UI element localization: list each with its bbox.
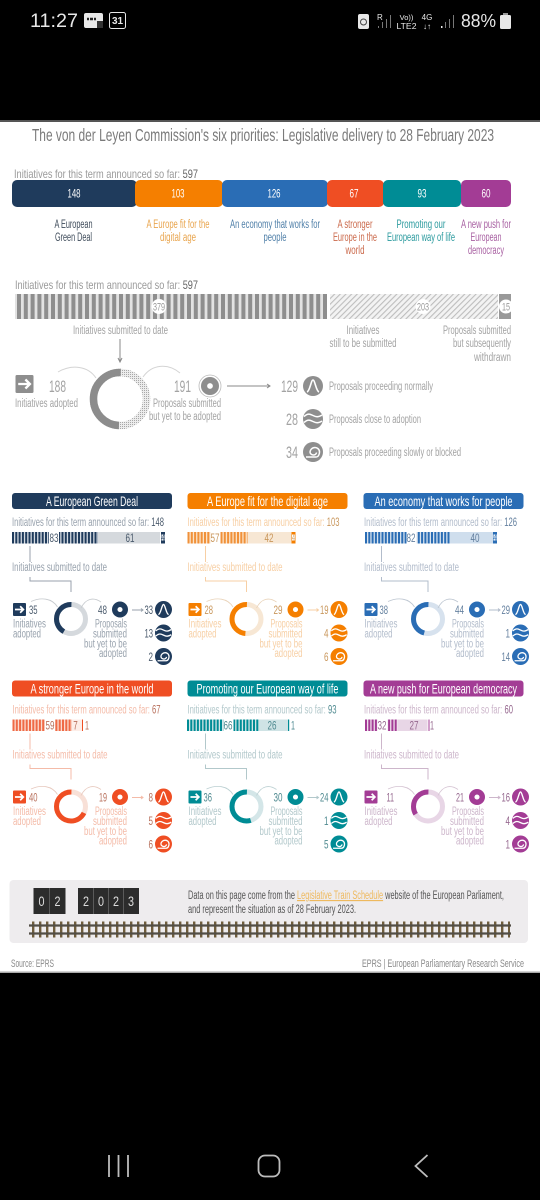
- priority labels: European: [470, 232, 502, 244]
- priority labels: Promoting our: [396, 219, 446, 231]
- date counter: 02 2023: 2: [54, 894, 60, 909]
- breakdown: 19: [320, 603, 329, 617]
- status bar: 83: [50, 531, 59, 545]
- adopted: adopted: [364, 816, 392, 828]
- adopted: 40: [29, 790, 38, 804]
- pending: adopted: [274, 836, 302, 848]
- pending: adopted: [99, 648, 127, 660]
- submitted label with connector: [364, 734, 459, 780]
- date counter: 02 2023: 0: [38, 894, 44, 909]
- adopted: adopted: [13, 628, 41, 640]
- breakdown: 1: [506, 626, 510, 640]
- date counter: 02 2023: 2: [113, 894, 119, 909]
- breakdown: slow or blocked: Proposals proceeding slowly or blocked: [329, 447, 461, 459]
- breakdown: 4: [324, 626, 329, 640]
- breakdown: 4: [506, 814, 510, 828]
- bar labels: withdrawn: [473, 352, 511, 364]
- submitted label with connector: [12, 546, 107, 592]
- stacked bar: six priorities: 60: [482, 188, 490, 200]
- pending: but yet to be: [84, 638, 127, 650]
- header: Promoting our European way of life: [196, 680, 339, 696]
- breakdown: 13: [144, 626, 153, 640]
- pending: 30: [274, 790, 283, 804]
- pending: 48: [98, 603, 107, 617]
- priority labels: A Europe fit for the: [146, 219, 210, 231]
- breakdown: [489, 601, 529, 665]
- status bar: 379 submitted, 203 still to submit, 15 withdrawn: 379: [153, 302, 165, 314]
- breakdown: close to adoption: 28: [286, 410, 298, 429]
- bar labels: still to be submitted: [330, 338, 396, 350]
- panel: A stronger Europe in the world: [12, 680, 172, 852]
- adopted: [188, 603, 222, 640]
- pending: 19: [99, 790, 107, 804]
- pending label: Proposals submitted: [153, 398, 221, 410]
- phone status bar: [30, 11, 511, 32]
- status bar: 1: [291, 718, 295, 732]
- breakdown: [132, 788, 172, 852]
- status bar: 4: [292, 534, 295, 542]
- pending: submitted: [450, 628, 484, 640]
- ring chart: [206, 786, 276, 821]
- status bar: 379 submitted, 203 still to submit, 15 withdrawn: 15: [502, 302, 510, 314]
- panel: overall status: [15, 278, 513, 462]
- adopted: Initiatives: [188, 618, 222, 630]
- priority labels: people: [264, 232, 286, 244]
- panel: A new push for European democracy: [364, 680, 529, 852]
- submitted label with connector: Initiatives submitted to date: [364, 750, 459, 762]
- pending: submitted: [268, 816, 302, 828]
- adopted: adopted: [188, 816, 216, 828]
- phone navigation bar: [109, 1155, 428, 1177]
- status bar: 57: [210, 531, 220, 545]
- header: A Europe fit for the digital age: [207, 493, 328, 509]
- submitted label with connector: Initiatives submitted to date: [12, 750, 108, 762]
- date counter: 02 2023: 0: [98, 894, 104, 909]
- status bar: 1: [430, 718, 434, 732]
- breakdown: proceeding normally: [281, 376, 433, 396]
- priority labels: Green Deal: [55, 232, 92, 244]
- adopted: 36: [204, 790, 212, 804]
- breakdown: 6: [324, 650, 329, 664]
- panel: A European Green Deal: [12, 493, 172, 665]
- ring chart: [388, 599, 458, 634]
- priority labels: An economy that works for: [230, 219, 320, 231]
- adopted: Initiatives: [364, 618, 398, 630]
- status bar: 379 submitted, 203 still to submit, 15 withdrawn: [15, 294, 513, 319]
- status bar: [12, 531, 165, 545]
- breakdown: [489, 788, 529, 852]
- breakdown: 1: [324, 814, 329, 828]
- adopted: [13, 603, 46, 640]
- pending: adopted: [456, 836, 484, 848]
- priority labels: A new push for: [461, 219, 511, 231]
- pending label: but yet to be adopted: [149, 411, 221, 423]
- adopted: 11: [386, 790, 394, 804]
- stacked bar: six priorities: 67: [350, 188, 358, 200]
- status bar: 1: [85, 718, 89, 732]
- phone status bar: LTE2: [396, 22, 417, 31]
- pending: 21: [456, 790, 464, 804]
- breakdown: 24: [320, 790, 329, 804]
- priority labels: European way of life: [387, 232, 455, 244]
- panel: A Europe fit for the digital age: [188, 493, 348, 665]
- breakdown: 2: [148, 650, 153, 664]
- breakdown: [132, 601, 172, 665]
- status bar: [188, 531, 296, 545]
- pending: [84, 602, 128, 660]
- pending: submitted: [450, 816, 484, 828]
- arrow: down to ring: [118, 339, 122, 362]
- ring chart: [388, 786, 458, 821]
- icon: pending target: [199, 375, 221, 397]
- phone status bar: 11:27: [30, 11, 78, 32]
- status bar: [187, 718, 295, 732]
- pending: but yet to be: [441, 826, 484, 838]
- status bar: 59: [46, 718, 55, 732]
- panel: Promoting our European way of life: [187, 680, 348, 852]
- status bar: 4: [494, 534, 497, 542]
- icon: railway track: [29, 926, 511, 934]
- submitted label with connector: [12, 734, 108, 780]
- stacked bar: six priorities: 126: [268, 188, 280, 200]
- submitted label with connector: [188, 546, 282, 592]
- submitted label with connector: Initiatives submitted to date: [188, 750, 282, 762]
- priority labels: A stronger: [338, 219, 373, 231]
- pending: but yet to be: [441, 638, 484, 650]
- pending: 29: [274, 603, 283, 617]
- adopted label: Initiatives adopted: [15, 398, 78, 410]
- pending: but yet to be: [260, 638, 302, 650]
- submitted label with connector: Initiatives submitted to date: [188, 562, 282, 574]
- pending: [260, 602, 304, 660]
- pending: Proposals: [270, 618, 303, 630]
- breakdown: 14: [502, 650, 510, 664]
- adopted: adopted: [188, 628, 216, 640]
- phone status bar: Vo)): [400, 13, 414, 22]
- status bar: [365, 531, 497, 545]
- priority labels: world: [345, 245, 364, 257]
- priority labels: Europe in the: [333, 232, 377, 244]
- status bar: 379 submitted, 203 still to submit, 15 withdrawn: 203: [417, 302, 429, 314]
- priority labels: democracy: [468, 245, 504, 257]
- breakdown: 33: [144, 603, 153, 617]
- header: A European Green Deal: [46, 493, 138, 509]
- status bar: 4: [162, 534, 165, 542]
- adopted: Initiatives: [13, 618, 46, 630]
- status bar: 27: [410, 718, 419, 732]
- breakdown: [308, 601, 348, 665]
- pending: but yet to be: [260, 826, 302, 838]
- ring chart: [31, 599, 101, 634]
- adopted: Initiatives: [188, 806, 222, 818]
- pending: [260, 789, 304, 848]
- bar labels: but subsequently: [453, 338, 511, 350]
- priority labels: A European: [54, 219, 92, 231]
- bar labels: Initiatives submitted to date: [73, 325, 168, 337]
- total: Initiatives for this term announced so far: 67: [12, 704, 160, 716]
- curved arrows from ring: [58, 366, 180, 378]
- breakdown: [308, 788, 348, 852]
- bar labels: Initiatives: [346, 325, 380, 337]
- adopted: [364, 790, 398, 828]
- header: [188, 680, 348, 696]
- heading: total initiatives: Initiatives for this term announced so far: 597: [14, 167, 198, 181]
- ring chart: [206, 599, 276, 634]
- adopted: [188, 790, 222, 828]
- date counter: 02 2023: 2: [83, 894, 89, 909]
- stacked bar: six priorities: 148: [68, 188, 80, 200]
- stacked bar: six priorities: [12, 180, 511, 207]
- bar labels: [73, 325, 511, 364]
- breakdown: slow or blocked: [286, 442, 461, 462]
- arrow: to breakdown: [227, 384, 270, 388]
- breakdown: slow or blocked: 34: [286, 443, 298, 462]
- phone status bar: 31: [112, 16, 123, 27]
- adopted: Initiatives: [13, 806, 46, 818]
- phone status bar: R: [377, 13, 383, 22]
- submitted label with connector: [188, 734, 282, 780]
- submitted label with connector: Initiatives submitted to date: [364, 562, 459, 574]
- header: [12, 493, 172, 509]
- breakdown: proceeding normally: Proposals proceeding normally: [329, 381, 433, 393]
- pending: 44: [455, 603, 464, 617]
- header: [188, 493, 348, 509]
- pending count: 191: [174, 377, 191, 396]
- priority labels: digital age: [160, 232, 196, 244]
- pending: [441, 789, 485, 848]
- status bar: 32: [378, 718, 387, 732]
- breakdown: close to adoption: [286, 409, 421, 429]
- adopted count: 188: [49, 377, 66, 396]
- status bar: 7: [73, 718, 78, 732]
- icon: adopted arrow: [16, 375, 34, 393]
- submitted label with connector: Initiatives submitted to date: [12, 562, 107, 574]
- date counter: 02 2023: 3: [128, 894, 134, 909]
- pending: submitted: [93, 628, 127, 640]
- adopted: 28: [204, 603, 213, 617]
- status bar: 61: [126, 531, 135, 545]
- breakdown: proceeding normally: 129: [281, 377, 298, 396]
- status bar: 66: [224, 718, 233, 732]
- stacked bar: six priorities: 103: [172, 188, 184, 200]
- panel: data note: [10, 880, 528, 943]
- header: A stronger Europe in the world: [30, 680, 154, 696]
- adopted: adopted: [13, 816, 41, 828]
- date counter: 02 2023: [34, 888, 139, 914]
- adopted: 35: [29, 603, 38, 617]
- status bar: 42: [264, 531, 274, 545]
- status bar: 40: [470, 531, 480, 545]
- status bar: 26: [268, 718, 277, 732]
- pending: Proposals: [270, 806, 303, 818]
- pending: Proposals: [95, 806, 127, 818]
- phone status bar: 4G: [422, 13, 432, 22]
- pending: Proposals: [452, 806, 484, 818]
- stacked bar: six priorities: 93: [418, 188, 426, 200]
- ring chart: [31, 786, 101, 821]
- ring chart: 188 adopted, 191 pending: [94, 372, 146, 426]
- pending: submitted: [268, 628, 302, 640]
- breakdown: 16: [502, 790, 510, 804]
- pending: adopted: [99, 836, 127, 848]
- infographic page: [0, 120, 540, 973]
- pending: [441, 602, 485, 660]
- pending: adopted: [274, 648, 302, 660]
- adopted: 38: [380, 603, 388, 617]
- phone status bar: 88%: [461, 11, 496, 31]
- total: Initiatives for this term announced so far: 103: [188, 517, 340, 529]
- pending: Proposals: [95, 618, 127, 630]
- phone status bar: ↓↑: [423, 22, 431, 31]
- pending: adopted: [456, 648, 484, 660]
- note text: [188, 890, 504, 916]
- breakdown: 6: [148, 838, 153, 852]
- status bar: [12, 718, 89, 732]
- adopted: Initiatives: [364, 806, 398, 818]
- breakdown: 8: [148, 790, 153, 804]
- pending label: [149, 398, 221, 423]
- total: Initiatives for this term announced so far: 93: [188, 704, 336, 716]
- total: Initiatives for this term announced so far: 148: [12, 517, 164, 529]
- breakdown: close to adoption: Proposals close to adoption: [329, 414, 421, 426]
- adopted: [13, 790, 46, 828]
- priority labels: [54, 219, 511, 257]
- heading: total initiatives: Initiatives for this term announced so far: 597: [15, 278, 198, 292]
- pending: Proposals: [452, 618, 484, 630]
- panel: An economy that works for people: [364, 493, 529, 665]
- submitted label with connector: [364, 546, 459, 592]
- breakdown: 1: [506, 838, 510, 852]
- breakdown: 5: [324, 838, 329, 852]
- pending: submitted: [93, 816, 127, 828]
- adopted: adopted: [364, 628, 392, 640]
- adopted: [364, 603, 398, 640]
- note text: and represent the situation as of 28 February 2023.: [188, 904, 356, 916]
- breakdown: 5: [148, 814, 153, 828]
- header: [12, 680, 172, 696]
- breakdown: 29: [502, 603, 510, 617]
- panel: overview priority bar: [12, 167, 511, 257]
- status bar: 82: [406, 531, 416, 545]
- pending: but yet to be: [84, 826, 127, 838]
- status bar: [365, 718, 434, 732]
- source: Source: EPRS: [11, 958, 54, 970]
- pending: [84, 789, 128, 848]
